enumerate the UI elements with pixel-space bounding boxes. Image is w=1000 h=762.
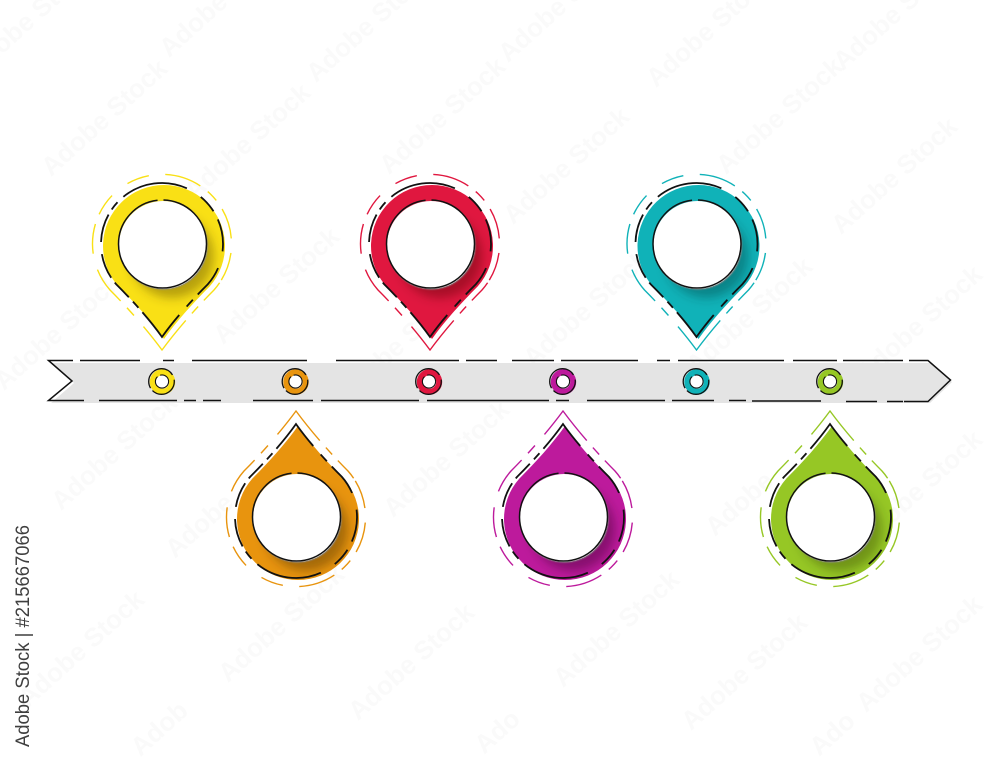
drop marker: orange bbox=[226, 411, 366, 587]
watermark pattern: Adobe bbox=[699, 465, 779, 542]
watermark pattern: Adobe Stock bbox=[517, 244, 655, 373]
watermark pattern: Adob bbox=[124, 695, 194, 762]
timeline node: yellow bbox=[149, 369, 174, 394]
timeline node: magenta bbox=[550, 369, 575, 394]
timeline ribbon arrow bbox=[48, 360, 952, 403]
drop marker: magenta bbox=[494, 411, 632, 587]
watermark pattern: Adobe Stock bbox=[497, 101, 635, 230]
watermark pattern: Adobe Stock bbox=[710, 51, 848, 180]
watermark pattern: Adobe Stock bbox=[342, 597, 480, 726]
watermark pattern: Adobe Stock bbox=[330, 279, 468, 408]
pin marker: yellow bbox=[93, 174, 232, 350]
watermark pattern: Adobe Stock bbox=[207, 221, 345, 350]
watermark pattern: Adobe Stock bbox=[377, 394, 515, 523]
watermark pattern: Adobe Stock bbox=[850, 589, 988, 718]
watermark pattern: Adobe Stock bbox=[373, 51, 511, 180]
watermark pattern: Ado bbox=[468, 703, 526, 759]
watermark pattern: Ado bbox=[803, 705, 861, 761]
stock credit text: Adobe Stock | #215667066 bbox=[12, 525, 34, 747]
watermark pattern: Adobe Stock bbox=[178, 77, 316, 206]
watermark pattern: Adobe Stock bbox=[35, 53, 173, 182]
watermark pattern: Adobe Stock bbox=[675, 607, 813, 736]
timeline node: teal bbox=[683, 369, 709, 394]
pin marker: teal bbox=[627, 174, 766, 350]
watermark pattern: Adobe Stock bbox=[680, 251, 818, 380]
watermark pattern: Adobe bbox=[159, 487, 239, 564]
watermark pattern: Adobe Stock bbox=[850, 259, 988, 388]
drop marker: green bbox=[760, 411, 900, 587]
watermark pattern: Adobe Stock bbox=[825, 111, 963, 240]
watermark pattern: Adobe Stock bbox=[212, 559, 350, 688]
watermark pattern: Adobe Stock bbox=[850, 424, 988, 553]
watermark pattern: Adobe Stock bbox=[12, 584, 150, 713]
watermark pattern: Adobe Stock bbox=[547, 564, 685, 693]
ribbon dashed outline bbox=[48, 360, 950, 402]
timeline node: orange bbox=[282, 369, 308, 394]
watermark pattern: Adobe Stock bbox=[45, 387, 183, 516]
ribbon fill bbox=[51, 363, 952, 403]
timeline node: green bbox=[817, 369, 842, 394]
timeline node: red bbox=[416, 369, 441, 394]
pin marker: red bbox=[360, 174, 500, 350]
